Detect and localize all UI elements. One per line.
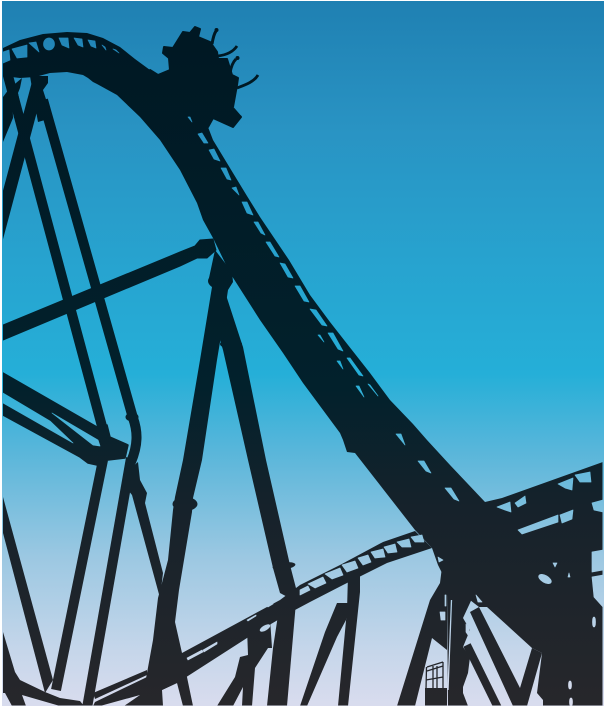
left tower struts	[0, 72, 138, 462]
right tower legs and columns	[397, 567, 542, 706]
central tall A-frame legs	[141, 250, 297, 706]
lower left legs	[3, 458, 163, 706]
lower track	[160, 531, 432, 690]
left double beam and joint	[3, 373, 128, 465]
supports under lower track	[217, 572, 360, 706]
thin column highlight	[448, 600, 452, 690]
maintenance cage	[425, 662, 447, 706]
lower far-left thin rails	[93, 670, 147, 706]
horizontal brace beam	[3, 239, 216, 340]
ride car with raised arms	[150, 27, 258, 127]
